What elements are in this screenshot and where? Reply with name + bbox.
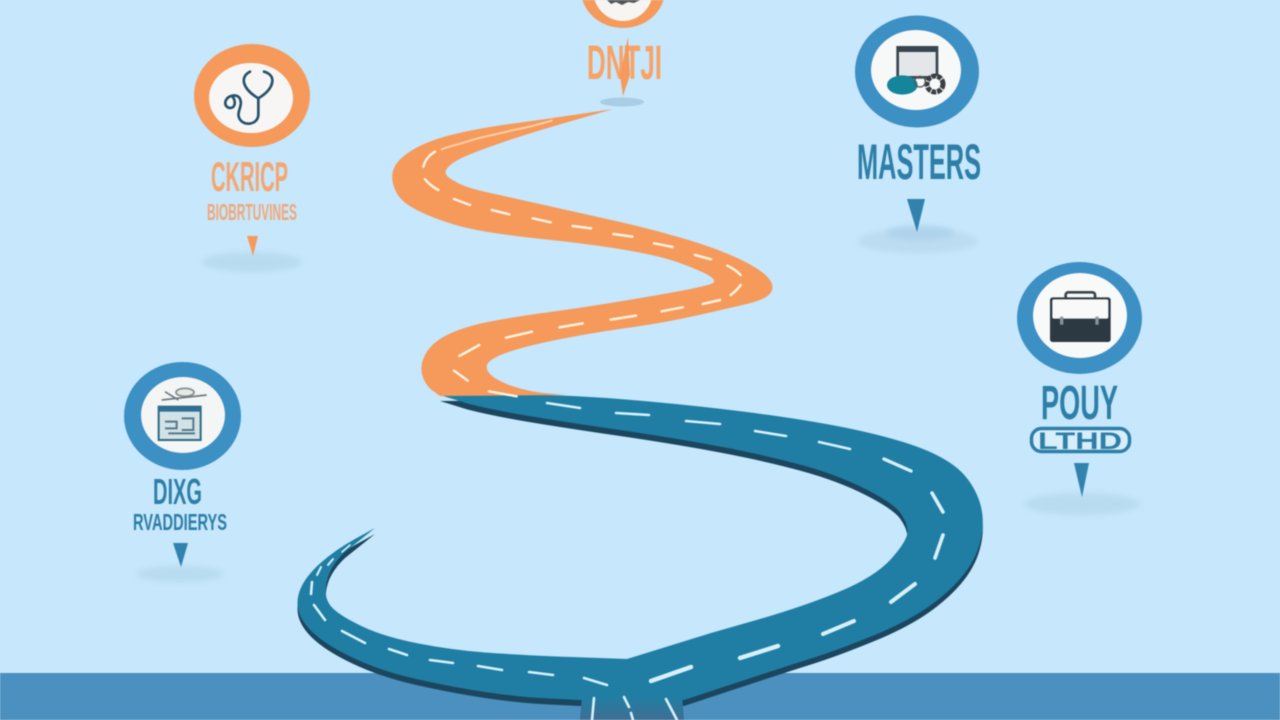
milestone: masters [855, 16, 981, 253]
ring: masters [855, 16, 979, 128]
label: left blue subtitle: RVADDIERYS [133, 509, 227, 535]
icon disc: briefcase [1033, 273, 1127, 358]
orange road surface [392, 109, 772, 396]
ground shadow: left blue [136, 566, 224, 582]
winding road [298, 109, 983, 720]
pointer: briefcase [1074, 463, 1089, 497]
label: left blue title: DIXG [153, 471, 202, 512]
orange road dashes [423, 121, 741, 396]
milestone: stethoscope [194, 44, 310, 272]
icon: stethoscope [225, 72, 272, 124]
milestone: briefcase [1017, 262, 1142, 515]
milestone: stethoscope: CKRICP [211, 153, 288, 200]
blue road dashes [311, 403, 943, 720]
ring: stethoscope [194, 44, 310, 147]
label: masters: MASTERS [857, 134, 981, 190]
pointer: stethoscope [247, 236, 258, 256]
label: briefcase title: POUY [1041, 377, 1118, 430]
icon: screen and gear [887, 47, 943, 95]
ring: top orange [581, 0, 665, 28]
road stem [580, 696, 684, 720]
icon: top cropped glyph [607, 0, 640, 5]
ground band [0, 673, 1280, 720]
pointer: left blue [173, 543, 188, 567]
blue road underside [298, 400, 983, 706]
icon: briefcase [1050, 292, 1111, 342]
ground shadow: stethoscope [202, 252, 302, 272]
label: top orange: DNTJI [587, 37, 662, 90]
icon disc: masters [871, 30, 961, 110]
icon disc: stethoscope [209, 63, 293, 133]
ground shadow: top orange [600, 98, 644, 106]
icon: document and cap [159, 388, 207, 440]
blue road surface [298, 394, 983, 700]
pointer: top orange [620, 37, 630, 96]
pointer: masters [907, 199, 925, 232]
badge: briefcase subtitle: LTHD [1038, 428, 1122, 455]
ring: briefcase [1017, 262, 1142, 374]
icon disc: top orange [593, 0, 653, 21]
milestone: left blue [124, 362, 241, 582]
icon disc: left blue [141, 377, 225, 453]
ring: left blue [124, 362, 241, 470]
milestone: top orange [581, 0, 665, 106]
ground shadow: briefcase [1024, 493, 1140, 515]
ground shadow: masters [858, 226, 978, 253]
badge: briefcase subtitle [1032, 428, 1130, 455]
label: stethoscope subtitle: BIOBRTUVINES [207, 199, 297, 225]
